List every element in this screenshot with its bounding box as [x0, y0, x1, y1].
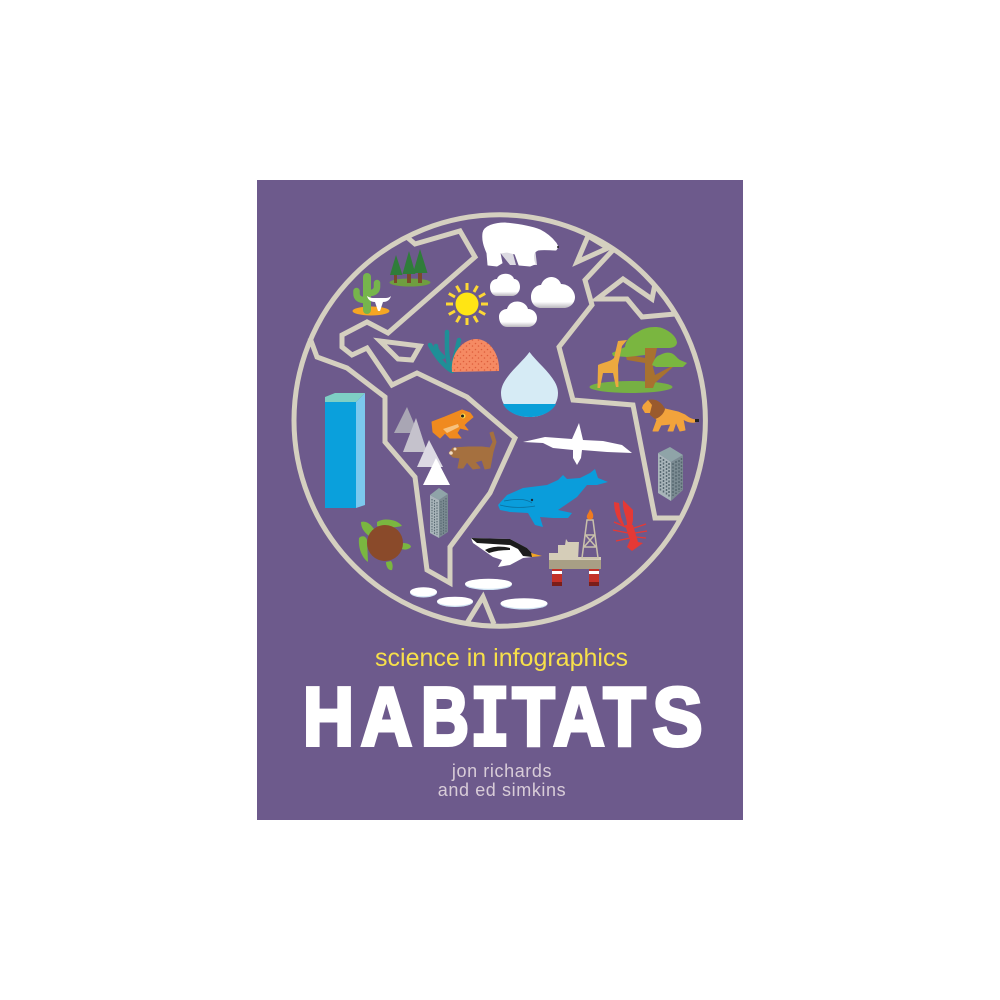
icon: penguin	[471, 538, 542, 567]
icon: frog	[432, 410, 473, 438]
title	[303, 670, 702, 772]
icon: whale	[498, 469, 608, 527]
title: A	[554, 671, 604, 763]
series line: science in infographics	[375, 644, 628, 672]
icon: coral	[430, 332, 499, 372]
icon: ice block column	[325, 393, 365, 508]
icon: polar bear	[483, 223, 559, 266]
icon: lion	[642, 399, 699, 431]
icon: monkey	[449, 432, 496, 469]
icon: acacia tree and giraffe	[590, 327, 687, 393]
title: A	[361, 671, 412, 763]
icon: sea turtle	[359, 519, 411, 570]
icon: office building right	[658, 447, 683, 501]
title: B	[421, 670, 469, 763]
icon: albatross	[523, 423, 632, 465]
authors: and ed simkins	[438, 780, 566, 800]
icon: mountains	[394, 407, 450, 485]
icon: lobster	[613, 500, 647, 551]
title: T	[512, 671, 555, 763]
icon: sun	[446, 283, 488, 325]
title: H	[303, 671, 354, 763]
icon: cactus and skull	[352, 277, 391, 316]
icon: oil rig	[549, 509, 601, 586]
icon: clouds	[490, 274, 575, 327]
authors: jon richards	[451, 761, 552, 781]
title: S	[653, 670, 702, 763]
icon: pine trees	[390, 249, 430, 286]
title: I	[470, 674, 510, 772]
authors	[438, 761, 566, 800]
icon: office building left	[430, 488, 448, 538]
icon: water drop	[501, 352, 558, 417]
icon: ice floes	[410, 579, 548, 610]
title: T	[603, 671, 646, 763]
globe map outline	[294, 215, 705, 626]
